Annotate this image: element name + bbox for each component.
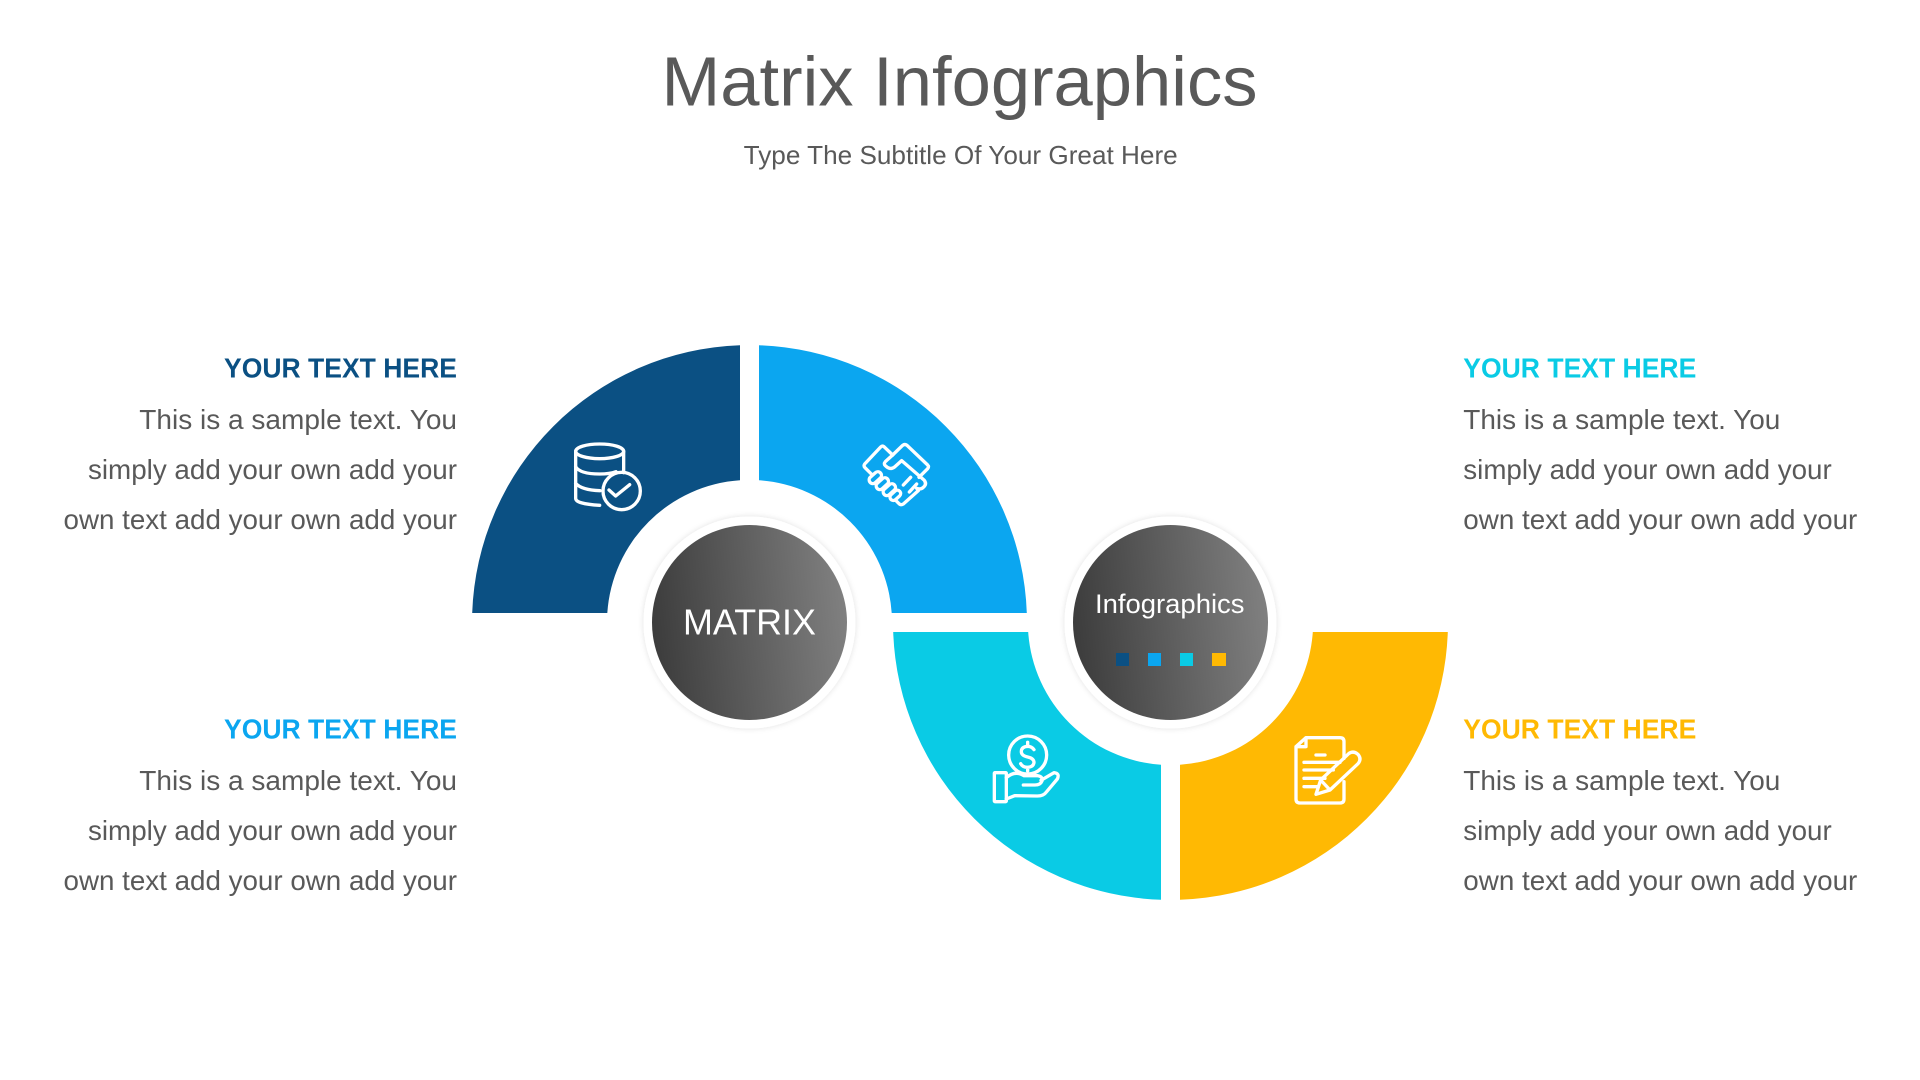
text block: bottom left [64, 714, 457, 896]
body: top right: own text add your own add your [1463, 504, 1857, 535]
body: top left: own text add your own add your [64, 504, 457, 535]
body: bottom left [64, 765, 457, 896]
text block: bottom right [1463, 714, 1857, 896]
icon: document with pencil [1296, 738, 1360, 803]
segment: blue quarter ring [759, 345, 1027, 613]
body: bottom right: simply add your own add your [1463, 815, 1832, 846]
body: bottom right: own text add your own add your [1463, 865, 1857, 896]
body: top left: simply add your own add your [88, 454, 457, 485]
icon: hand holding dollar coin [994, 736, 1058, 802]
heading: top right: YOUR TEXT HERE [1463, 352, 1696, 384]
heading: top left: YOUR TEXT HERE [224, 352, 457, 384]
text block: top right [1463, 352, 1857, 535]
body: bottom left: own text add your own add your [64, 865, 457, 896]
body: top right: This is a sample text. You [1463, 404, 1780, 435]
body: bottom right: This is a sample text. You [1463, 765, 1780, 796]
subtitle: Type The Subtitle Of Your Great Here [744, 140, 1178, 170]
body: top left: This is a sample text. You [139, 404, 457, 435]
segment: navy quarter ring [472, 345, 740, 613]
circle: infographics hub [1064, 516, 1276, 728]
title: Matrix Infographics [662, 43, 1258, 121]
segment: cyan quarter ring [893, 632, 1161, 900]
body: top left [64, 404, 457, 535]
heading: bottom right: YOUR TEXT HERE [1463, 714, 1696, 745]
label: MATRIX: MATRIX [683, 602, 816, 642]
label: Infographics: Infographics [1095, 589, 1244, 619]
icon: handshake [864, 444, 928, 505]
body: bottom left: This is a sample text. You [139, 765, 457, 796]
text block: top left [64, 352, 457, 535]
segment: gold quarter ring [1180, 632, 1448, 900]
icon: database with check [576, 444, 640, 510]
body: top right [1463, 404, 1857, 535]
body: bottom left: simply add your own add your [88, 815, 457, 846]
circle: matrix hub [644, 516, 856, 728]
heading: bottom left: YOUR TEXT HERE [224, 714, 457, 745]
body: bottom right [1463, 765, 1857, 896]
legend squares [1116, 653, 1226, 666]
body: top right: simply add your own add your [1463, 454, 1832, 485]
